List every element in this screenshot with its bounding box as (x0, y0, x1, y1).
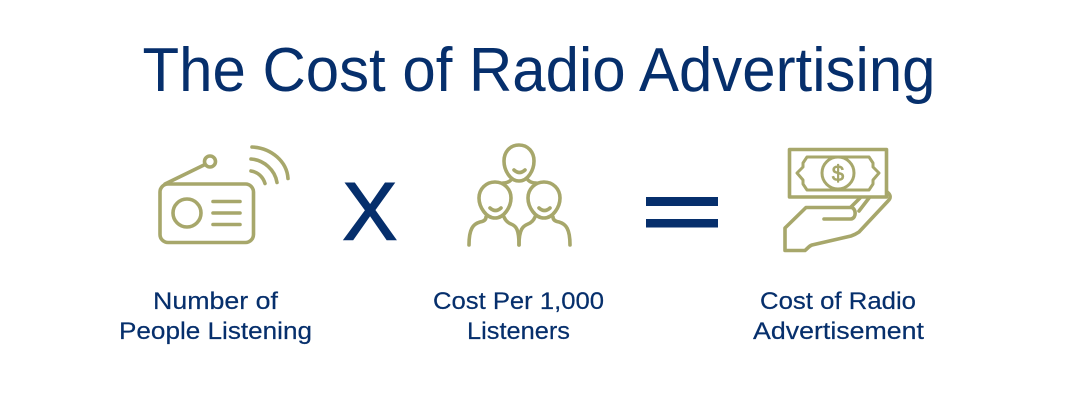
label: number of people listening: Number of (153, 288, 278, 315)
label: cost of radio advertisement (753, 288, 924, 345)
title: The Cost of Radio Advertising (142, 36, 936, 105)
label: cost per 1,000 listeners: Listeners (467, 318, 570, 345)
label: cost of radio advertisement: Advertisement (753, 318, 924, 345)
label: cost per 1,000 listeners (433, 288, 604, 345)
icon: hand holding money (785, 150, 890, 250)
label: number of people listening (119, 288, 312, 345)
label: number of people listening: People Listening (119, 318, 312, 345)
multiply sign: X (342, 166, 397, 258)
label: cost of radio advertisement: Cost of Radio (760, 288, 916, 315)
label: cost per 1,000 listeners: Cost Per 1,000 (433, 288, 604, 315)
icon: radio (160, 147, 288, 242)
equals sign (646, 197, 718, 228)
icon: group of people (469, 145, 570, 245)
icon: hand holding money: $ (832, 161, 844, 186)
